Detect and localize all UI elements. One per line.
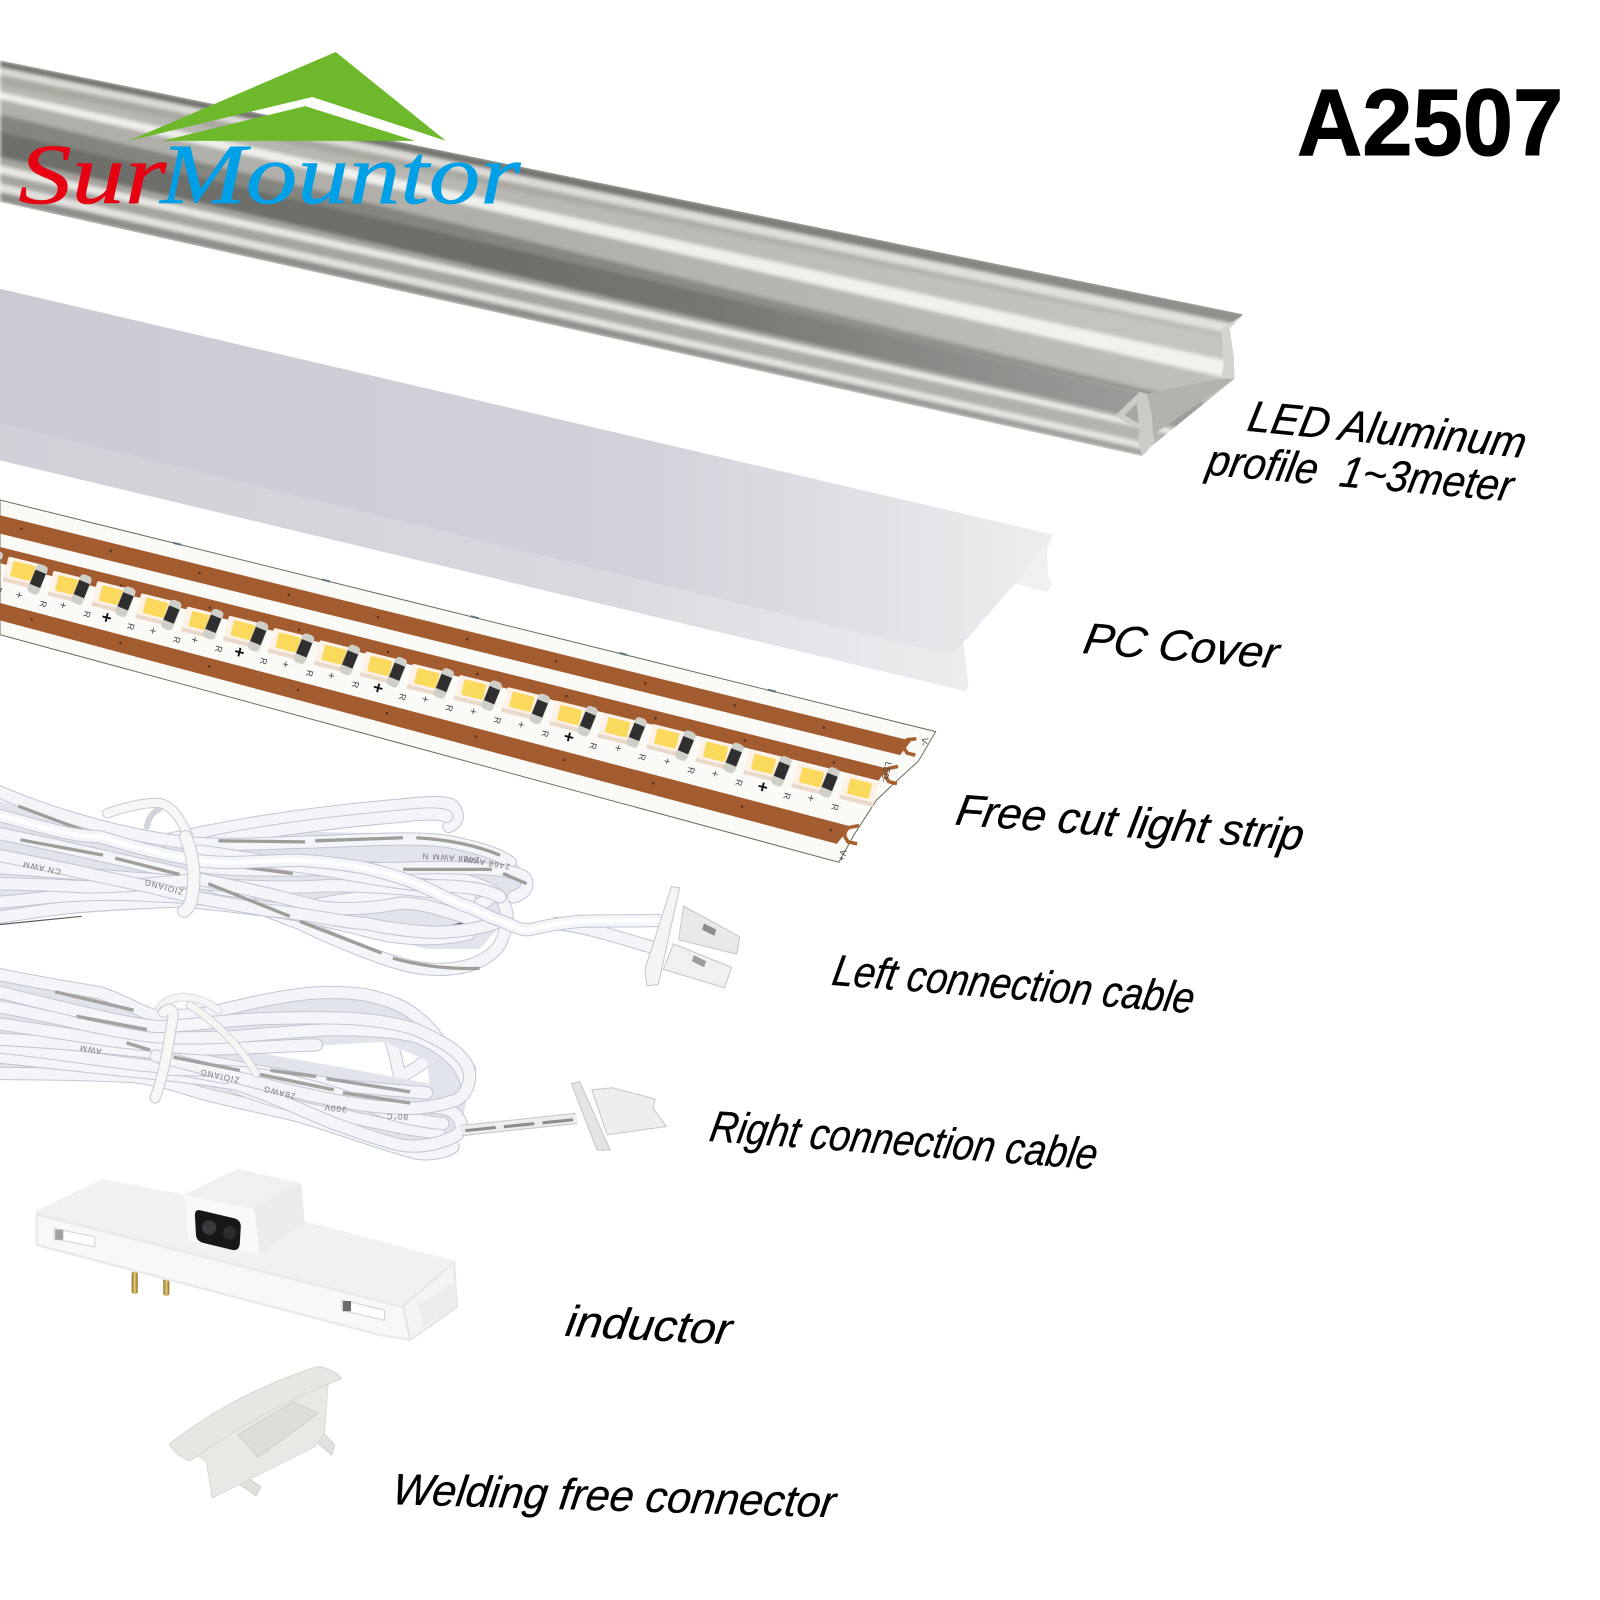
cable tie [107, 803, 194, 911]
logo wordmark: Sur [18, 127, 167, 222]
logo: SurMountor: Mountor [159, 127, 521, 222]
LED chip row: + [371, 677, 386, 699]
copper strip dots [20, 529, 898, 832]
profile end: floor [1147, 379, 1235, 435]
panel: LED light strip [0, 500, 936, 862]
sensor window [195, 1210, 241, 1250]
LED chip row: R [304, 669, 315, 678]
title: model number: A2507 [1297, 70, 1563, 176]
LED chip row: R [349, 680, 361, 689]
label: left connection cable: Left connection cable [829, 946, 1199, 1023]
cap body [194, 1378, 329, 1498]
panel: right connection cable [0, 969, 666, 1154]
connector plug [645, 887, 740, 988]
wire print text [78, 1043, 408, 1121]
LED chip row: R [258, 657, 269, 666]
label: profile length: profile 1~3meter [1201, 436, 1520, 511]
panel: left connection cable [0, 788, 740, 988]
LED chip row: + [662, 755, 672, 769]
copper strip 3 [0, 603, 851, 844]
LED chip row [0, 545, 880, 820]
panel: inductor [37, 1170, 457, 1340]
LED chip row: R [829, 803, 840, 812]
strip end labels: V- [918, 736, 930, 747]
pins [227, 1431, 335, 1496]
LED chip row: + [281, 659, 290, 672]
label: welding free connector: Welding free connector [389, 1465, 841, 1527]
profile end: wall edge [1220, 315, 1243, 379]
LED chip row: + [190, 634, 199, 647]
end connector pads [845, 739, 916, 844]
LED chip row: R [685, 766, 697, 775]
LED chip row: + [232, 641, 247, 663]
profile end: inner lip [1115, 392, 1155, 456]
label: LED aluminum profile: LED Aluminum [1244, 392, 1531, 468]
tab recess [418, 1281, 457, 1327]
copper strip 2 [0, 547, 887, 781]
strip end labels: V+ [836, 848, 849, 862]
LED chip row: R [587, 741, 599, 751]
LED chip row: + [99, 606, 114, 628]
wire print text: ZIOIANG [199, 1067, 240, 1084]
clip slots [54, 1229, 385, 1320]
LED chip row: R [171, 635, 182, 645]
LED chip row: R [636, 753, 648, 762]
body top [37, 1181, 454, 1306]
label: free cut light strip: Free cut light strip [952, 786, 1308, 860]
LED chip row: R [81, 610, 93, 619]
panel: welding free connector [169, 1366, 342, 1498]
LED chip row: + [562, 726, 576, 748]
inner small loop [353, 1005, 427, 1077]
LED chip row: R [733, 778, 745, 787]
label: inductor: inductor [563, 1297, 738, 1354]
wire print text: 28AWG [262, 1084, 296, 1101]
logo: SurMountor [18, 52, 521, 222]
connector plug [571, 1082, 666, 1150]
LED chip row: + [756, 776, 770, 798]
LED chip row: R [539, 729, 551, 738]
wire print text: 80°C [386, 1112, 408, 1121]
logo mountain [129, 52, 446, 141]
LED chip row: R [443, 704, 455, 713]
sensor housing [187, 1170, 303, 1253]
wire shadows [0, 902, 490, 927]
panel: PC cover [0, 289, 1053, 691]
LED chip row: + [327, 670, 336, 683]
strip end labels [836, 736, 930, 862]
label: PC cover: PC Cover [1080, 615, 1285, 678]
LED chip row: + [613, 742, 623, 755]
LED chip row: + [468, 705, 478, 719]
strip end labels: LED- [879, 761, 893, 783]
LED chip row: + [516, 719, 526, 732]
cap block [238, 1402, 318, 1457]
copper strip 1 [0, 515, 911, 755]
wire print text: 2468 AWM [462, 854, 511, 871]
LED chip row: + [148, 625, 157, 638]
right tab [403, 1262, 457, 1340]
gold pins [132, 1271, 169, 1296]
LED chip row: R [396, 692, 408, 702]
cable lead [461, 1118, 577, 1131]
LED chip row: + [421, 693, 430, 706]
LED chip row: + [806, 792, 816, 805]
wire print text: CN AWM [21, 859, 62, 876]
LED chip row: R [37, 600, 49, 609]
cable tie [155, 997, 256, 1098]
wire print stripes [18, 806, 527, 969]
wire print text: ZIOIANG [143, 877, 184, 897]
LED chip row: + [710, 768, 720, 781]
LED chip row: + [58, 599, 68, 613]
bundle backing [0, 969, 467, 1153]
profile end: lip shadow [1124, 403, 1139, 423]
wire print stripes [55, 992, 410, 1103]
board marks [173, 543, 867, 714]
LED chip row: R [125, 622, 136, 631]
LED chip row: R [781, 791, 793, 801]
label: right connection cable: Right connection cable [706, 1102, 1102, 1179]
body front [37, 1214, 410, 1340]
bundle backing [0, 801, 528, 949]
wire print text: 300V [323, 1103, 347, 1114]
wire print text [21, 851, 511, 897]
LED chip row: + [14, 589, 24, 602]
wire print text: AWM [78, 1043, 102, 1056]
LED chip row: R [213, 645, 224, 654]
LED chip row: R [491, 716, 503, 725]
curved top [169, 1366, 342, 1461]
panel: aluminium profile [0, 60, 1265, 484]
wire print text: 2468 AWM N [421, 851, 480, 864]
